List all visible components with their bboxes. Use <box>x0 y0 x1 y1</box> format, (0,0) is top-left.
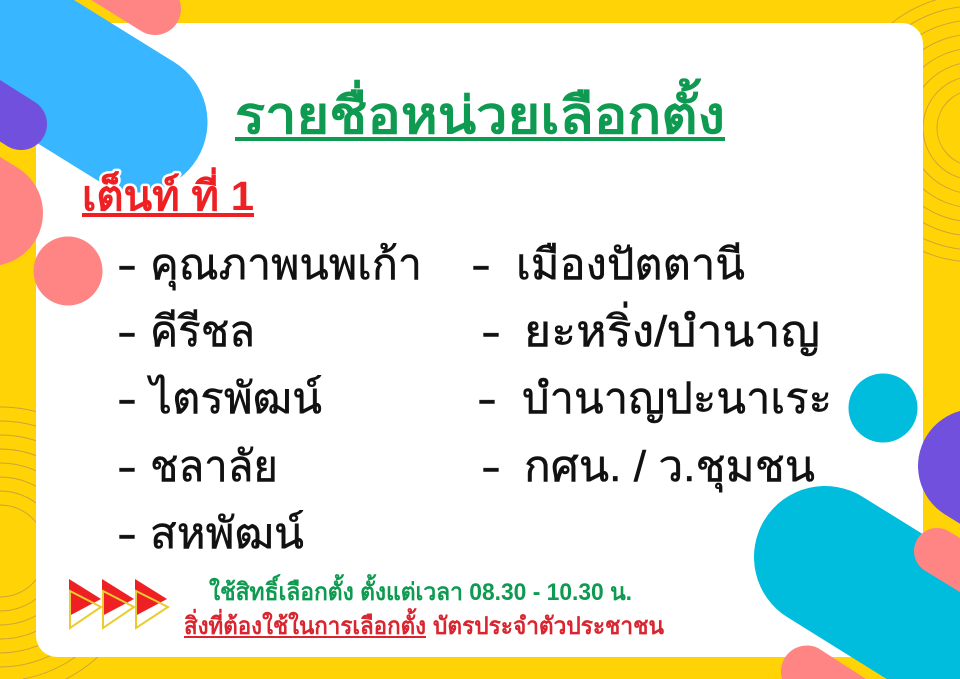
list: left column: - <box>117 510 137 558</box>
decoration: cyan capsule <box>754 486 960 679</box>
decoration: top-left pink capsule <box>60 0 155 9</box>
list: right column: กศน. / ว.ชุมชน <box>524 443 815 493</box>
note: required document: สิ่งที่ต้องใช้ในการเลือกตั้ง <box>184 607 426 640</box>
list: right column: - <box>481 443 501 491</box>
decoration: blue capsule <box>0 0 137 122</box>
decoration: purple capsule <box>0 73 21 124</box>
title: รายชื่อหน่วยเลือกตั้ง <box>235 78 725 144</box>
list: left column: สหพัฒน์ <box>150 510 304 558</box>
list: left column: คีรีชล <box>150 308 255 356</box>
note: required document <box>184 607 665 640</box>
list: right column: บำนาญปะนาเระ <box>522 375 832 423</box>
subheading: tent 1: เต็นท์ ที่ 1 <box>82 167 254 219</box>
list: left column: คุณภาพนพเก้า <box>150 241 422 291</box>
list: right column: - <box>481 308 501 356</box>
decoration: pink circle <box>34 236 102 306</box>
list: right column: เมืองปัตตานี <box>516 241 745 289</box>
list: left column: - <box>117 375 137 423</box>
list: left column: - <box>117 241 137 289</box>
list: left column <box>117 241 422 558</box>
list: left column: - <box>117 308 137 356</box>
list: left column: ชลาลัย <box>150 443 278 491</box>
list: right column: - <box>471 241 491 289</box>
decoration: cyan circle <box>848 374 918 442</box>
decoration: right pink capsule <box>937 551 960 602</box>
note: required document: บัตรประจำตัวประชาชน <box>433 613 665 640</box>
note: voting time: ใช้สิทธิ์เลือกตั้ง ตั้งแต่เวลา 08.30 - 10.30 น. <box>209 573 632 606</box>
list: right column <box>471 241 832 493</box>
list: right column: ยะหริ่ง/บำนาญ <box>524 302 820 356</box>
list: left column: ไตรพัฒน์ <box>147 374 322 423</box>
decoration: bottom pink capsule <box>781 646 866 679</box>
icon: triple arrows <box>69 579 168 628</box>
list: left column: - <box>117 443 137 491</box>
list: right column: - <box>477 375 497 423</box>
